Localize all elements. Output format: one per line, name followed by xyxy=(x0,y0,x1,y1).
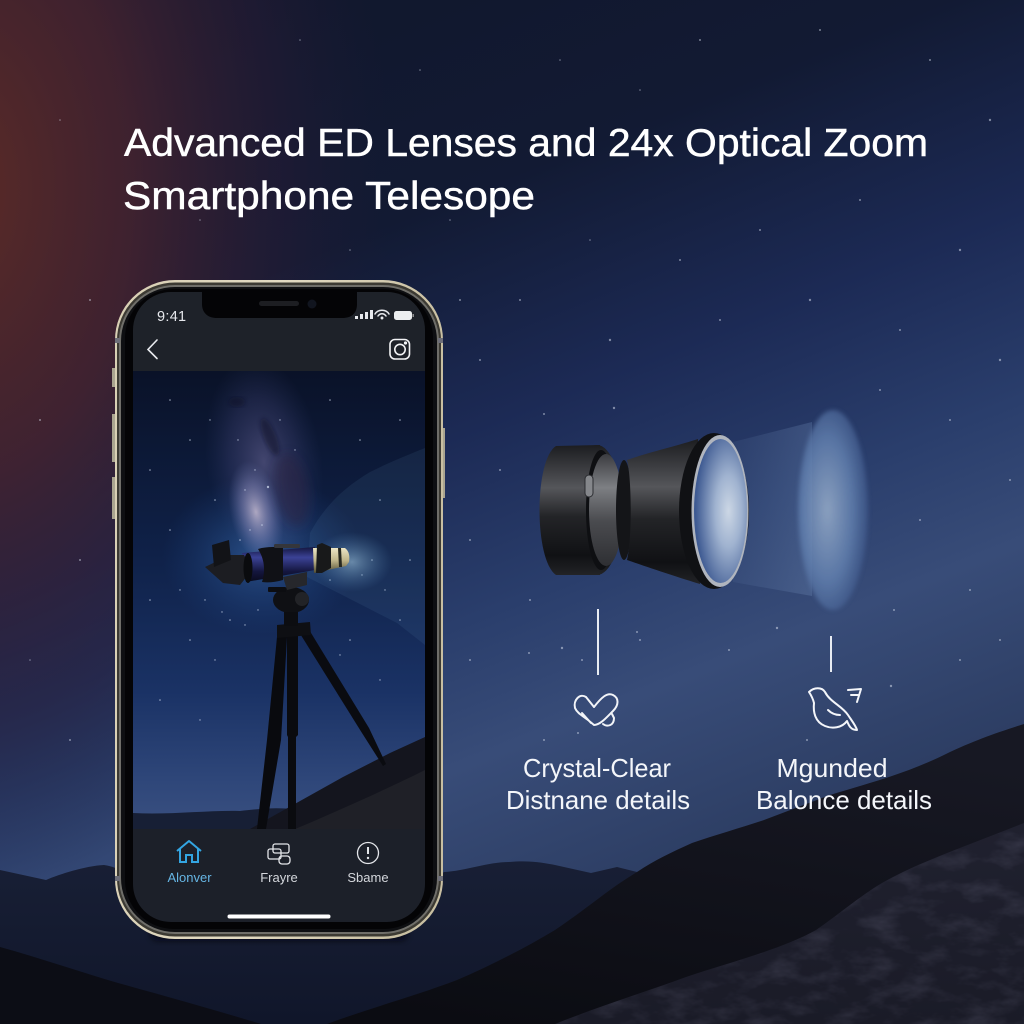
lens: glass xyxy=(694,439,747,583)
nav tab: home xyxy=(167,841,212,885)
screen: bottom navigation xyxy=(133,829,425,922)
background: large right hill xyxy=(327,724,1024,1024)
lens attachment xyxy=(540,410,868,610)
connector line xyxy=(830,636,832,672)
photo: stars xyxy=(149,399,411,721)
nav tab: home: Alonver xyxy=(167,870,212,885)
label: Crystal-Clear xyxy=(523,753,671,783)
lens: light ring xyxy=(589,454,623,566)
screen: app header xyxy=(133,292,425,371)
photo: tripod xyxy=(257,622,386,829)
nav tab: frame xyxy=(260,844,298,885)
phone: home indicator xyxy=(228,914,330,918)
nav tab: share xyxy=(347,842,389,885)
title: Advanced ED Lenses and 24x Optical Zoom xyxy=(124,122,928,165)
phone: side buttons xyxy=(112,368,445,519)
lens: cone body xyxy=(627,439,700,584)
icon: back chevron xyxy=(148,340,157,358)
nav tab: share: Sbame xyxy=(347,870,389,885)
phone: shadow xyxy=(150,925,408,941)
feature: crystal-clear xyxy=(506,609,690,815)
title xyxy=(123,122,928,218)
status: time: 9:41 xyxy=(157,309,186,325)
lens: neck xyxy=(616,460,632,560)
lens: switch xyxy=(585,475,593,497)
icon: home xyxy=(177,841,201,862)
lens: rear barrel xyxy=(540,445,600,575)
label: Distnane details xyxy=(506,785,690,815)
phone: notch xyxy=(202,292,357,318)
photo: light cone from telescope xyxy=(307,448,425,645)
background: far mountains xyxy=(0,861,637,1024)
icon: camera xyxy=(390,340,410,359)
photo: distant ridge xyxy=(133,808,300,829)
background: stars xyxy=(29,29,1011,741)
light beam xyxy=(733,422,812,596)
title: Smartphone Telesope xyxy=(123,175,535,218)
status: signal xyxy=(355,310,373,319)
photo: milky way xyxy=(180,374,342,618)
background: foreground textured slope xyxy=(555,823,1024,1024)
screen: photo of telescope xyxy=(133,350,425,829)
phone: screen xyxy=(133,292,425,922)
label: Mgunded xyxy=(776,753,888,783)
lens: groove xyxy=(586,450,616,570)
icon: info circle xyxy=(358,842,378,864)
photo: dark hillside xyxy=(250,737,425,829)
label xyxy=(756,753,932,815)
phone: antenna bands xyxy=(115,338,443,881)
background: near left hill xyxy=(0,947,261,1024)
phone xyxy=(112,280,445,941)
light disc xyxy=(798,410,868,610)
feature: balance xyxy=(756,636,932,815)
lens: front ring xyxy=(679,433,749,589)
photo: telescope xyxy=(205,540,349,585)
phone: metal frame xyxy=(115,280,443,939)
phone: camera xyxy=(308,300,316,308)
lens: rear flange xyxy=(572,445,622,575)
label xyxy=(506,753,690,815)
status: battery xyxy=(394,311,414,320)
phone: speaker xyxy=(259,301,299,306)
icon: bird xyxy=(809,688,861,730)
nav tab: frame: Frayre xyxy=(260,870,298,885)
connector line xyxy=(597,609,599,675)
icon: linked frames xyxy=(268,844,290,864)
icon: heart xyxy=(575,694,618,726)
photo: tripod head xyxy=(268,572,309,626)
lens: silver rim xyxy=(692,435,748,587)
status: wifi xyxy=(375,310,389,319)
label: Balonce details xyxy=(756,785,932,815)
